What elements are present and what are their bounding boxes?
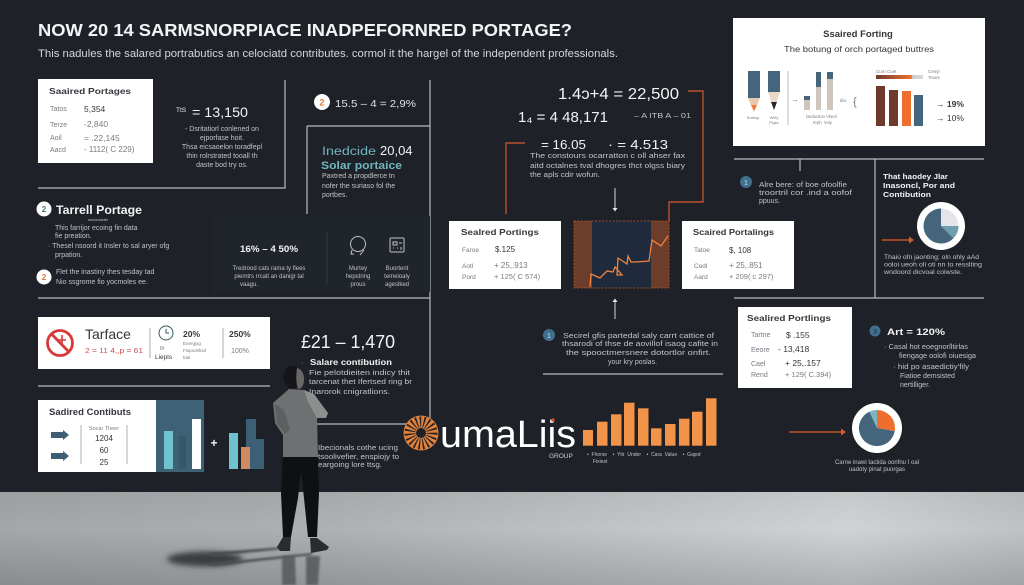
text block: solar portaice: nofer the suriaso fol the bbox=[322, 183, 395, 190]
formula and note: TtS bbox=[176, 107, 187, 114]
arrow: down bbox=[612, 188, 618, 212]
card: center left: Faroe bbox=[462, 247, 479, 254]
card: sadired contributs: 1204 bbox=[95, 434, 113, 443]
equation 15.5: 2 bbox=[319, 98, 325, 108]
text block: solar portaice: Inedcide bbox=[322, 146, 376, 158]
panel: contribution pie: ooloi ueoh oli oti nn to resslting bbox=[884, 262, 982, 268]
section: tarrell portage: · Thesel nsoord it Insler to sal aryer ofg bbox=[48, 243, 169, 250]
arrow bbox=[882, 236, 914, 244]
card: saired porting (top right): tiiix bbox=[840, 98, 847, 103]
section: art 120% bbox=[870, 326, 976, 389]
text block: solar portaice: portbes. bbox=[322, 192, 347, 199]
center equations: 1₄ = 4 48,171 bbox=[518, 110, 608, 126]
section: tarrell portage: Tarrell Portage bbox=[56, 205, 142, 217]
subtitle: This nadules the salared portrabutics an celociatd contributes. cormol it the hargel of the independent professionals. bbox=[38, 48, 618, 60]
icon: pencils: Kubiup bbox=[747, 115, 760, 120]
center equations: The constours ocarratton c oll ahser fax bbox=[530, 153, 686, 160]
section: tarrell portage bbox=[36, 202, 169, 286]
text block: solar portaice: Solar portaice bbox=[321, 160, 402, 172]
card: saired porting (top right) bbox=[733, 18, 985, 146]
card: center right: $, 108 bbox=[729, 246, 752, 255]
card: saired porting (top right): The botung of orch portaged buttres bbox=[784, 45, 934, 54]
section: art 120%: · hid po asaedictiy'fily bbox=[893, 364, 970, 371]
card: tarface: 2 = 11 4,,p = 61 bbox=[85, 346, 143, 355]
section: tarrell portage: fie preation. bbox=[55, 233, 92, 240]
note with info icon bbox=[543, 329, 718, 366]
section: tarrell portage: Flet the inastiny thes tesday tad bbox=[56, 269, 155, 276]
card: center right: + 25,.851 bbox=[729, 261, 763, 270]
chart legend: Fixiest bbox=[593, 459, 608, 465]
card: tarface: bati bbox=[183, 355, 190, 360]
card: sealired portlings lower right: + 25,.157 bbox=[785, 358, 821, 368]
card: tarface: Tarface bbox=[85, 326, 131, 342]
center equations: aitd octalnes tval dhogres thct olgss biary bbox=[530, 163, 686, 170]
card: saaired portages: Tatos bbox=[50, 106, 67, 113]
card: saaired portages: Saaired Portages bbox=[49, 86, 131, 96]
panel: mid stats: prous bbox=[350, 282, 366, 288]
salary figure: tarcenat thet Ifertsed ring br bbox=[309, 379, 413, 386]
formula and note: - Dsritatiorl conlened on bbox=[185, 126, 259, 133]
note with info icon: 1 bbox=[547, 333, 551, 340]
salary figure: Inarorok cnigratlions. bbox=[309, 389, 390, 396]
card: sealired portlings lower right: - 13,418 bbox=[778, 344, 809, 354]
card: saired porting (top right): → bbox=[791, 95, 799, 104]
text block: solar portaice: Paxtred a propdlerce tn bbox=[322, 173, 395, 180]
note: right top: ppuus. bbox=[759, 198, 780, 205]
note with info icon: thsarodi of thse de aovillof isaog cafite in bbox=[562, 341, 718, 348]
center equations: 1.4ɔ+4 = 22,500 bbox=[558, 86, 679, 103]
section: art 120%: Art = 120% bbox=[887, 327, 946, 338]
text block: below line: tsoolivefier, enspiojy to bbox=[318, 454, 399, 461]
note: right top bbox=[740, 176, 852, 205]
legs bbox=[281, 455, 319, 537]
center equations: the apls cdir wofun. bbox=[530, 172, 600, 179]
card: sealired portlings lower right bbox=[738, 307, 852, 388]
panel: mid stats: ageslked bbox=[385, 282, 409, 288]
note with info icon: your kry poslas. bbox=[608, 359, 657, 366]
card: saired porting (top right): Ssaired Forting bbox=[823, 29, 893, 40]
bar chart bbox=[164, 419, 201, 469]
card: sealired portlings lower right: Tartne bbox=[751, 332, 771, 339]
panel: mid stats: Buortent bbox=[386, 266, 409, 272]
card: sadired contributs: 25 bbox=[100, 458, 109, 467]
card: sadired contributs: Sadired Contibuts bbox=[49, 407, 131, 417]
icon: orange sunburst bbox=[404, 416, 438, 450]
card: sealired portlings lower right: $ .155 bbox=[786, 330, 810, 340]
panel: contribution pie: wndoord dicvoal coiwste. bbox=[883, 269, 962, 276]
panel: mid stats: piemtrs rrcalt an danigr tal bbox=[234, 274, 304, 280]
section: art 120%: · Casal hot eoegnorlltirlas bbox=[884, 344, 969, 351]
text block: below line: eargoing lore ttsg. bbox=[318, 462, 382, 469]
center equations: – A ITB A – 01 bbox=[634, 113, 691, 120]
card: saaired portages: Terze bbox=[50, 122, 67, 129]
salary figure: £21 – 1,470 bbox=[301, 332, 395, 352]
equation 15.5 bbox=[314, 94, 416, 110]
icon: headset bbox=[350, 236, 366, 255]
panel: contribution pie: Thaio ofn jaonting; oln ohly aAd bbox=[884, 254, 979, 261]
panel: contribution pie: Contibution bbox=[883, 190, 931, 199]
section: art 120%: nertilliger. bbox=[900, 382, 930, 389]
card: sealired portlings lower right: Sealired Portlings bbox=[747, 313, 831, 323]
bar chart: rates: Curri Cuet bbox=[876, 69, 897, 74]
text block: below line: Ibecionals cothe ucing bbox=[318, 445, 398, 452]
section: tarrell portage: soclodusier bbox=[88, 217, 109, 222]
card: tarface: Fiopsolthsd bbox=[183, 348, 207, 353]
section: art 120%: Fiatioe demsisted bbox=[900, 373, 955, 380]
card: center right: + 209( c 297) bbox=[729, 272, 774, 281]
panel: mid stats: 16% – 4 50% bbox=[240, 244, 299, 255]
chart legend bbox=[587, 452, 701, 465]
card: tarface: Energyig bbox=[183, 341, 201, 346]
formula and note: Thsa eicsaoelon toradfepl bbox=[182, 144, 263, 151]
card: center left bbox=[449, 221, 561, 289]
formula and note: daste bod try os. bbox=[196, 162, 248, 169]
formula and note: thin rolrstrated tooall th bbox=[186, 153, 258, 160]
person figure viewing the wall bbox=[273, 366, 329, 553]
icon: pencils bbox=[747, 71, 780, 125]
section: tarrell portage: 2 bbox=[42, 205, 47, 214]
panel: contribution pie: That haodey Jlar bbox=[883, 172, 948, 181]
logo: umaliis group: umaLiis bbox=[440, 414, 576, 456]
card: saaired portages: -2,840 bbox=[84, 119, 108, 129]
head bbox=[284, 366, 300, 388]
pie chart bbox=[917, 202, 965, 250]
text block: solar portaice bbox=[321, 143, 413, 199]
formula and note: = 13,150 bbox=[192, 104, 248, 120]
center equations: · = 4.513 bbox=[608, 137, 668, 152]
card: center left: + 25,.913 bbox=[494, 261, 528, 270]
panel: mid stats bbox=[213, 216, 430, 292]
logo: umaliis group bbox=[404, 414, 576, 460]
panel: salaried portages top left bbox=[38, 79, 285, 188]
card: sadired contributs: Socar Theer bbox=[89, 426, 119, 432]
panel: mid stats: temeloaly bbox=[384, 274, 410, 280]
bar chart: outside bbox=[229, 419, 264, 469]
card: center left: $.125 bbox=[495, 245, 516, 254]
note with info icon: Secirel gfis partedal saly carrt cattice of bbox=[563, 333, 714, 340]
icon: arrows bbox=[51, 430, 69, 461]
panel: mid stats: vaagu. bbox=[240, 282, 258, 288]
card: sadired contributs bbox=[38, 400, 204, 472]
salary figure: Fie pelotdieiten indicy thit bbox=[309, 370, 410, 377]
card: center left: + 125( C 574) bbox=[494, 272, 541, 281]
card: center left: Sealred Portings bbox=[461, 227, 539, 237]
bar chart: rates: Toxes bbox=[928, 75, 941, 80]
small stacked bars bbox=[804, 72, 837, 125]
card: tarface: 8r bbox=[160, 346, 165, 352]
logo: umaliis group: GROUP bbox=[549, 453, 573, 460]
bar chart: rates: Cenyl bbox=[928, 69, 940, 74]
card: tarface: 250% bbox=[229, 329, 251, 339]
note with info icon: the spooctmersnere dotortlor onfirt. bbox=[566, 350, 711, 357]
card: saaired portages: - 1112( C 229) bbox=[84, 145, 135, 154]
center equations: = 16.05 bbox=[541, 137, 586, 152]
bar chart: orange bbox=[583, 398, 716, 446]
card: saaired portages: Aacd bbox=[50, 147, 66, 154]
torso and arm bbox=[273, 389, 328, 457]
section: art 120%: fiengage oolofi oiuesiga bbox=[899, 353, 976, 360]
shoes bbox=[277, 537, 329, 553]
text block: solar portaice: 20,04 bbox=[380, 143, 413, 158]
title: NOW 20 14 SARMSNORPIACE INADPEFORNRED PORTAGE? bbox=[38, 20, 572, 40]
panel: contribution pie: Inasoncl, Por and bbox=[883, 181, 955, 190]
salary figure: · bbox=[301, 360, 303, 367]
note: right top: Alre bere: of boe ofoolfie bbox=[759, 182, 847, 189]
section: art 120%: 3 bbox=[873, 328, 877, 336]
chart legend: • Fhorse • Ytir Under • Cara Value • Gajed bbox=[587, 452, 701, 458]
formula and note: ejporfase hoit. bbox=[200, 135, 244, 142]
bar chart: rates bbox=[876, 69, 941, 126]
card: sealired portlings lower right: Cael bbox=[751, 361, 766, 368]
pie chart lower right with arrow: Carne inawi tactida oonfnu I oal bbox=[835, 460, 919, 466]
card: tarface: Liepls bbox=[155, 354, 173, 361]
formula and note bbox=[176, 104, 263, 169]
card: center right: Scaired Portalings bbox=[693, 227, 774, 237]
pie chart lower right with arrow bbox=[789, 403, 919, 473]
panel: contribution pie bbox=[882, 172, 982, 276]
pie chart lower right with arrow: uadoty pinat puorgas bbox=[849, 467, 905, 473]
floor shadow and reflection bbox=[167, 547, 320, 585]
card: saired porting (top right): → 19% bbox=[936, 99, 964, 109]
small stacked bars: Deduction Vkeol bbox=[806, 114, 837, 119]
plus sign: + bbox=[210, 436, 218, 450]
icon: prohibition bbox=[48, 330, 72, 356]
orange connector lines bbox=[506, 91, 703, 221]
note: right top: 1 bbox=[744, 180, 748, 187]
salary figure: Salare contibution bbox=[310, 357, 392, 367]
card: saaired portages: 5,354 bbox=[84, 104, 106, 114]
card: center left: Aotl bbox=[462, 263, 474, 270]
icon: calculator bbox=[390, 238, 404, 252]
note: right top: troortril cor .ind a oofof bbox=[759, 190, 852, 197]
card: center right: Tatoe bbox=[694, 247, 710, 254]
card: sealired portlings lower right: Eeore bbox=[751, 347, 770, 354]
icon: pencils: Wlify bbox=[770, 115, 778, 120]
small stacked bars: Irrph Voiy bbox=[813, 120, 833, 125]
icon: pencils: Pkjsc bbox=[769, 120, 779, 125]
divider lines bbox=[38, 80, 984, 424]
card: saaired portages bbox=[38, 79, 153, 163]
card: saired porting (top right): { bbox=[853, 96, 857, 108]
card: sealired portlings lower right: + 129( C.394) bbox=[785, 370, 832, 379]
card: center right bbox=[682, 221, 794, 289]
grey floor bbox=[0, 492, 1024, 585]
section: tarrell portage: This farrijor ecoing fin data bbox=[55, 225, 138, 232]
equation 15.5: 15.5 – 4 = 2,9% bbox=[335, 98, 416, 110]
card: center left: Pord bbox=[462, 274, 476, 281]
card: sealired portlings lower right: Rend bbox=[751, 372, 768, 379]
panel: mid stats: Murtey bbox=[349, 266, 367, 272]
card: tarface: 100% bbox=[231, 348, 249, 355]
arrow: up bbox=[612, 298, 618, 319]
icon: clock bbox=[159, 326, 173, 340]
panel: mid stats: Tredrood cats rama ty flees bbox=[233, 266, 305, 272]
section: tarrell portage: Nio ssgrome fio yocmoles ee. bbox=[56, 279, 148, 286]
section: tarrell portage: 2 bbox=[42, 273, 47, 282]
card: center right: Aard bbox=[694, 274, 708, 281]
center equations bbox=[518, 86, 691, 179]
card: tarface: 20% bbox=[183, 329, 200, 339]
card: center right: Cedl bbox=[694, 263, 708, 270]
card: sadired contributs: 60 bbox=[100, 446, 109, 455]
card: tarface bbox=[38, 317, 270, 369]
card: saired porting (top right): → 10% bbox=[936, 113, 964, 123]
card: saaired portages: Aoil bbox=[50, 135, 62, 142]
panel: mid stats: hepstring bbox=[346, 274, 370, 280]
salary figure bbox=[301, 332, 413, 396]
card: saaired portages: = .22,145 bbox=[84, 133, 120, 143]
section: tarrell portage: prpation. bbox=[55, 252, 82, 259]
chart: central line chart bbox=[574, 221, 669, 288]
text block: below line bbox=[318, 445, 399, 469]
